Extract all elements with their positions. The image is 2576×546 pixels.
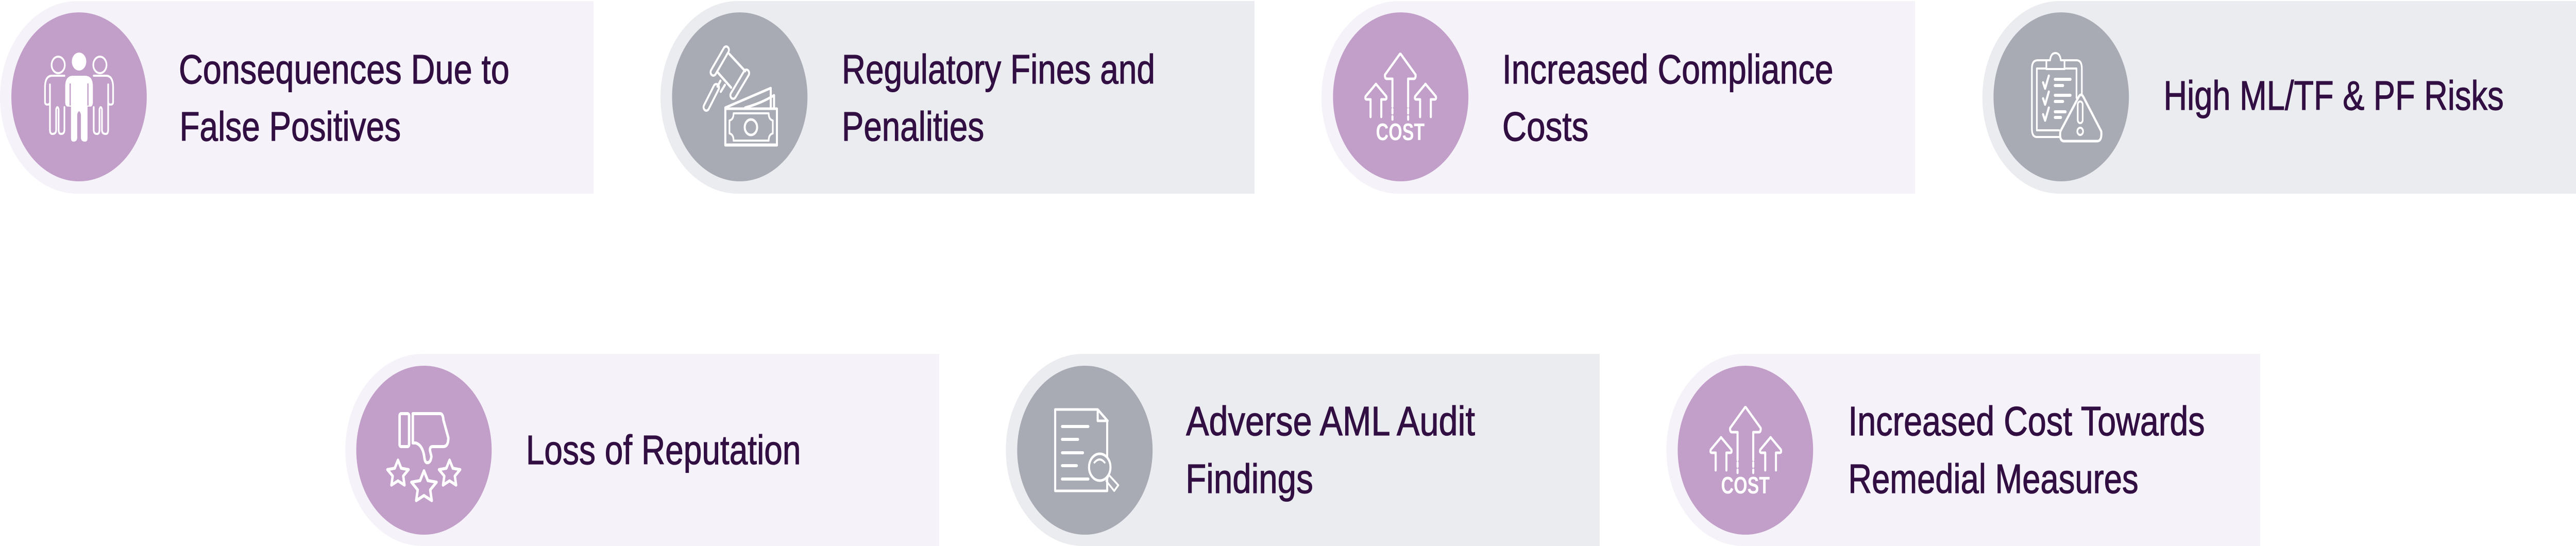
- label: Regulatory Fines and: [842, 46, 1155, 93]
- label: [1502, 46, 1833, 150]
- label: Remedial Measures: [1848, 456, 2139, 502]
- label: [1848, 398, 2205, 502]
- panel background: [1666, 354, 2260, 546]
- label: Increased Cost Towards: [1848, 398, 2205, 445]
- icon: gavel and money: [706, 50, 777, 145]
- label: Loss of Reputation: [526, 427, 801, 473]
- icon: rising cost arrows: [1365, 54, 1436, 145]
- icon: checklist with warning: [2032, 53, 2102, 141]
- icon disc: [11, 12, 147, 181]
- left star: [387, 460, 409, 485]
- arrows: [1365, 54, 1436, 120]
- panel: loss of reputation: [345, 354, 939, 546]
- centre person: [65, 53, 93, 142]
- panel background: [0, 1, 594, 194]
- warning triangle: [2060, 95, 2102, 141]
- label: Findings: [1185, 456, 1313, 502]
- left person: [45, 57, 65, 134]
- panel background: [1006, 354, 1600, 546]
- arrows: [1710, 407, 1781, 473]
- label: Penalities: [842, 104, 984, 150]
- panel background: [1321, 1, 1915, 194]
- icon disc: [357, 366, 492, 535]
- icon disc: [1333, 12, 1468, 181]
- panel: increased cost towards remedial measures: [1666, 354, 2260, 546]
- label: False Positives: [180, 104, 401, 150]
- label: Increased Compliance: [1502, 46, 1833, 93]
- centre star: [412, 471, 436, 501]
- right star: [439, 460, 460, 485]
- panel: regulatory fines and penalities: [660, 1, 1255, 194]
- gavel: [706, 50, 747, 107]
- cost text: COST: [1376, 118, 1425, 145]
- label: [179, 46, 510, 150]
- label: Costs: [1502, 104, 1588, 150]
- icon: thumbs down and stars: [387, 414, 460, 501]
- label: [842, 46, 1155, 150]
- label: High ML/TF & PF Risks: [2164, 73, 2504, 119]
- magnifier: [1089, 454, 1118, 491]
- clipboard: [2032, 53, 2082, 137]
- panel: consequences due to false positives: [0, 1, 594, 194]
- panel: increased compliance costs: [1321, 1, 1915, 194]
- thumbs down: [400, 414, 448, 463]
- label: [1185, 398, 1475, 502]
- label: Consequences Due to: [179, 46, 510, 93]
- right person: [93, 57, 113, 134]
- icon disc: [1017, 366, 1153, 535]
- icon: rising cost arrows: [1710, 407, 1781, 499]
- icon disc: [1993, 12, 2129, 181]
- panel background: [660, 1, 1255, 194]
- icon: group of people: [45, 53, 113, 142]
- panel background: [345, 354, 939, 546]
- document: [1055, 410, 1108, 491]
- panel: adverse AML audit findings: [1006, 354, 1600, 546]
- panel: high ML/TF and PF risks: [1982, 1, 2576, 194]
- cost text: COST: [1721, 472, 1770, 499]
- panel background: [1982, 1, 2576, 194]
- label: Adverse AML Audit: [1186, 398, 1475, 445]
- icon disc: [1677, 366, 1813, 535]
- icon: audit document with magnifier: [1055, 410, 1118, 491]
- banknotes: [725, 88, 777, 145]
- icon disc: [672, 12, 807, 181]
